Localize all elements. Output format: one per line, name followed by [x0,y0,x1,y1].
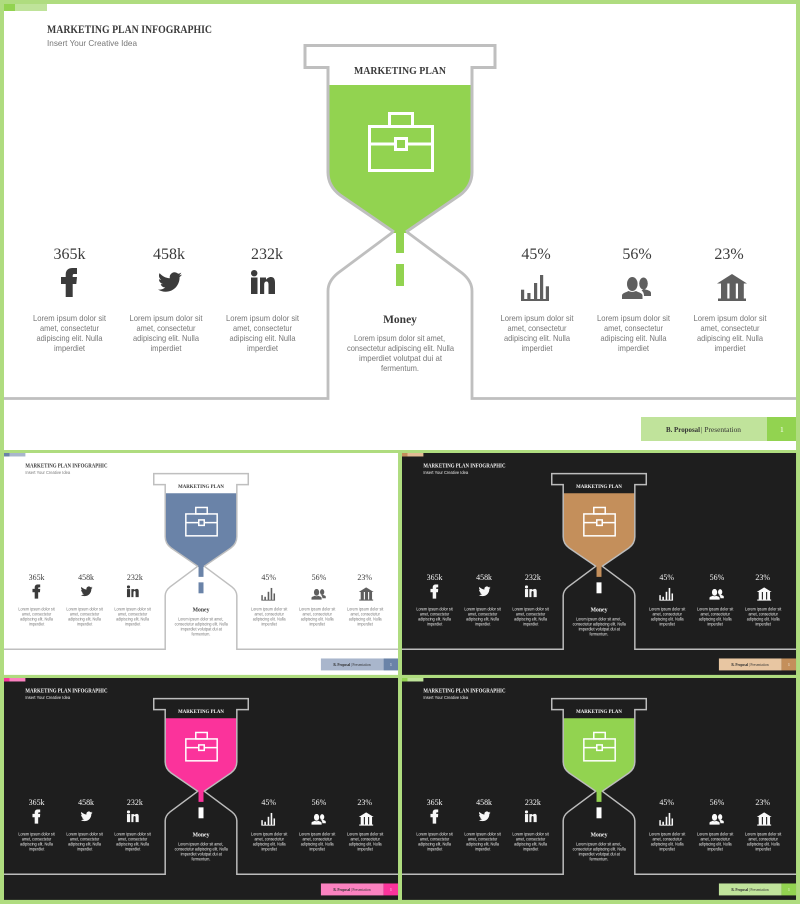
hourglass [4,46,796,398]
stat: 45%: Lorem ipsum dolor sit [649,607,686,612]
stat: 232k [226,246,300,353]
stat: 365k: amet, consectetur [22,837,52,842]
stat: 56%: 56% [622,246,652,263]
stat: 56%: imperdiet [618,343,650,353]
money text: imperdiet volutpat dui at [579,627,621,632]
stat: 232k: amet, consectetur [118,837,148,842]
stat: 365k [18,798,56,852]
stat: 365k: imperdiet [29,847,45,852]
stat: 232k: 232k [251,246,283,263]
subtitle: Insert Your Creative Idea [423,470,469,475]
stat: 56%: adipiscing elit. Nulla [699,842,732,847]
stat: 458k: amet, consectetur [136,323,196,333]
stat: 56%: 56% [710,798,725,807]
stat: 45%: amet, consectetur [652,612,682,617]
corner tab [4,4,47,11]
stat: 365k [33,246,107,353]
title: MARKETING PLAN INFOGRAPHIC [25,688,107,694]
stat: 45%: 45% [659,573,674,582]
stat: 365k: amet, consectetur [420,612,450,617]
stat: 56%: 56% [312,798,327,807]
money text [347,314,454,373]
stat: 56%: adipiscing elit. Nulla [600,333,667,343]
stat: 232k: Lorem ipsum dolor sit [114,832,152,837]
money text: Money [193,833,210,839]
stat: 23%: imperdiet [357,847,374,852]
stat: 56%: amet, consectetur [303,612,332,617]
stat: 365k: Lorem ipsum dolor sit [33,313,107,323]
stat: 365k: adipiscing elit. Nulla [20,842,54,847]
stat: 23%: adipiscing elit. Nulla [747,842,780,847]
stat: 45%: Lorem ipsum dolor sit [500,313,574,323]
money text: Money [591,608,608,614]
corner tab [402,678,423,681]
footer bar: B. Proposal [731,663,748,667]
money text: consectetur adipiscing elit. Nulla [573,847,626,852]
footer bar [641,417,796,441]
stat: 365k [416,573,454,627]
stat: 458k [464,798,502,852]
stat: 56%: adipiscing elit. Nulla [301,842,334,847]
stat: 56%: amet, consectetur [303,837,332,842]
money text [175,833,228,862]
stat: 23%: adipiscing elit. Nulla [349,617,382,622]
money text: Lorem ipsum dolor sit amet, [178,842,223,847]
footer bar: B. Proposal [333,888,350,892]
money text: Money [383,314,417,326]
stat: 45%: amet, consectetur [254,837,284,842]
money text: fermentum. [590,632,608,637]
title: MARKETING PLAN INFOGRAPHIC [423,463,505,469]
stat: 365k: imperdiet [427,622,443,627]
panel: brown dark slide [402,453,796,675]
icon: briefcase [186,507,217,536]
stat: 45%: adipiscing elit. Nulla [651,617,684,622]
stat: 56% [597,246,671,353]
stat: 23%: adipiscing elit. Nulla [349,842,382,847]
stat: 56%: amet, consectetur [604,323,663,333]
stat: 23% [694,246,767,353]
stat: 365k [416,798,454,852]
stat: 458k: 458k [476,573,492,582]
subtitle: Insert Your Creative Idea [423,695,469,700]
stat: 56%: Lorem ipsum dolor sit [697,607,734,612]
stat: 232k: imperdiet [523,847,539,852]
corner tab [402,453,423,456]
money text: fermentum. [192,857,210,862]
title: MARKETING PLAN INFOGRAPHIC [47,24,212,36]
icon: briefcase [584,732,615,761]
stat: 45%: adipiscing elit. Nulla [253,617,286,622]
stat: 23% [347,798,384,852]
footer bar: 1 [390,663,392,667]
icon: briefcase [584,507,615,536]
stat: 23%: Lorem ipsum dolor sit [347,607,384,612]
stat: 45% [500,246,574,353]
stat: 45%: imperdiet [261,622,278,627]
stat: 56%: Lorem ipsum dolor sit [597,313,671,323]
stat: 56%: amet, consectetur [701,612,730,617]
stat: 232k: adipiscing elit. Nulla [514,842,548,847]
corner tab [4,678,25,681]
stat: 56%: imperdiet [707,622,724,627]
hourglass label: MARKETING PLAN [576,709,622,715]
stat: 23%: Lorem ipsum dolor sit [745,607,782,612]
stat: 45%: adipiscing elit. Nulla [504,333,570,343]
hourglass [4,474,398,649]
money text: Lorem ipsum dolor sit amet, [178,617,223,622]
stat: 458k: amet, consectetur [70,837,100,842]
money text: Lorem ipsum dolor sit amet, [354,333,445,343]
subtitle: Insert Your Creative Idea [25,470,71,475]
stat: 45%: amet, consectetur [254,612,284,617]
stat: 458k [66,798,104,852]
money text: consectetur adipiscing elit. Nulla [573,622,626,627]
footer bar [321,883,398,895]
stat: 45%: Lorem ipsum dolor sit [251,607,288,612]
stat: 45%: 45% [261,573,276,582]
footer bar [321,658,398,670]
stat: 23%: imperdiet [755,622,772,627]
corner tab [4,453,25,456]
stat: 23%: amet, consectetur [749,837,778,842]
money text [573,833,626,862]
stat: 458k: amet, consectetur [70,612,100,617]
stat: 365k: 365k [54,246,86,263]
stat: 23% [347,573,384,627]
stat: 23%: Lorem ipsum dolor sit [694,313,767,323]
stat: 23%: adipiscing elit. Nulla [747,617,780,622]
stat: 365k: amet, consectetur [420,837,450,842]
stat: 365k: 365k [427,573,443,582]
stat: 458k: Lorem ipsum dolor sit [464,607,502,612]
stat: 23%: adipiscing elit. Nulla [697,333,763,343]
stat: 45%: adipiscing elit. Nulla [651,842,684,847]
panel: main light green slide [4,4,796,450]
stat: 365k: imperdiet [29,622,45,627]
money text [175,608,228,637]
stat: 56%: 56% [312,573,327,582]
footer bar: 1 [780,425,784,434]
stat: 365k: imperdiet [427,847,443,852]
stat: 23%: amet, consectetur [700,323,760,333]
money text: fermentum. [192,632,210,637]
stat: 458k: adipiscing elit. Nulla [68,842,102,847]
stat: 56%: imperdiet [309,847,326,852]
stat: 365k: amet, consectetur [22,612,52,617]
stat: 45% [649,798,686,852]
stat: 365k: 365k [29,798,45,807]
hourglass [402,474,796,649]
stat: 56% [299,798,336,852]
stat: 23%: amet, consectetur [351,612,380,617]
stat: 56%: Lorem ipsum dolor sit [299,607,336,612]
money text: consectetur adipiscing elit. Nulla [175,622,228,627]
stat: 365k: imperdiet [54,343,86,353]
footer bar: | Presentation [351,888,371,892]
stat: 232k: imperdiet [125,622,141,627]
stat: 232k: imperdiet [125,847,141,852]
stat: 23%: amet, consectetur [351,837,380,842]
stat: 365k: adipiscing elit. Nulla [418,842,452,847]
stat: 458k: imperdiet [77,622,93,627]
icon: briefcase [369,114,433,170]
stat: 232k: Lorem ipsum dolor sit [114,607,152,612]
footer bar: | Presentation [749,663,769,667]
stat: 232k: amet, consectetur [516,612,546,617]
panel: pink dark slide [4,678,398,900]
stat: 458k [464,573,502,627]
stat: 23%: amet, consectetur [749,612,778,617]
stat: 232k [114,798,152,852]
stat: 45%: imperdiet [659,622,676,627]
money text: consectetur adipiscing elit. Nulla [347,343,454,353]
money text: fermentum. [381,363,419,373]
stat: 232k [512,798,550,852]
stat: 232k: 232k [127,573,143,582]
footer bar: | Presentation [749,888,769,892]
stat: 365k: adipiscing elit. Nulla [20,617,54,622]
stat: 232k: amet, consectetur [118,612,148,617]
hourglass label: MARKETING PLAN [178,484,224,490]
stat: 232k: adipiscing elit. Nulla [116,617,150,622]
stat: 232k: imperdiet [247,343,279,353]
stat: 23% [745,573,782,627]
stat: 45% [251,573,288,627]
money text: imperdiet volutpat dui at [181,852,223,857]
stat: 365k: 365k [29,573,45,582]
stat: 365k: Lorem ipsum dolor sit [18,832,56,837]
title: MARKETING PLAN INFOGRAPHIC [423,688,505,694]
stat: 458k: Lorem ipsum dolor sit [66,607,104,612]
stat: 365k: Lorem ipsum dolor sit [416,832,454,837]
stat: 458k: adipiscing elit. Nulla [133,333,199,343]
stat: 458k: adipiscing elit. Nulla [466,617,500,622]
stat: 458k: amet, consectetur [468,837,498,842]
hourglass [402,699,796,874]
stat: 458k: imperdiet [150,343,182,353]
stat: 232k: 232k [525,573,541,582]
stat: 365k [18,573,56,627]
stat: 23%: imperdiet [714,343,746,353]
stat: 365k: adipiscing elit. Nulla [418,617,452,622]
stat: 458k: adipiscing elit. Nulla [466,842,500,847]
money text: imperdiet volutpat dui at [181,627,223,632]
stat: 232k: adipiscing elit. Nulla [514,617,548,622]
stat: 45%: imperdiet [522,343,553,353]
subtitle: Insert Your Creative Idea [47,38,137,48]
stat: 56%: imperdiet [707,847,724,852]
stat: 232k: Lorem ipsum dolor sit [512,607,550,612]
stat: 23% [745,798,782,852]
stat: 232k: amet, consectetur [516,837,546,842]
stat: 232k: amet, consectetur [233,323,292,333]
subtitle: Insert Your Creative Idea [25,695,71,700]
footer bar: 1 [788,888,790,892]
stat: 232k: imperdiet [523,622,539,627]
money text: Money [193,608,210,614]
stat: 365k: amet, consectetur [40,323,99,333]
stat: 458k: Lorem ipsum dolor sit [66,832,104,837]
stat: 45%: imperdiet [659,847,676,852]
stat: 56%: adipiscing elit. Nulla [301,617,334,622]
stat: 365k: Lorem ipsum dolor sit [416,607,454,612]
stat: 45%: amet, consectetur [652,837,682,842]
stat: 23%: 23% [357,573,372,582]
hourglass [4,699,398,874]
footer bar: | Presentation [351,663,371,667]
hourglass label: MARKETING PLAN [178,709,224,715]
stat: 45%: Lorem ipsum dolor sit [251,832,288,837]
stat: 458k: 458k [476,798,492,807]
stat: 232k: Lorem ipsum dolor sit [226,313,300,323]
stat: 458k: amet, consectetur [468,612,498,617]
stat: 56%: adipiscing elit. Nulla [699,617,732,622]
stat: 56%: 56% [710,573,725,582]
stat: 23%: imperdiet [755,847,772,852]
stat: 458k: 458k [153,246,185,263]
stat: 23%: Lorem ipsum dolor sit [347,832,384,837]
money text: Money [591,833,608,839]
money text: Lorem ipsum dolor sit amet, [576,617,621,622]
stat: 232k [114,573,152,627]
stat: 458k: imperdiet [475,847,491,852]
money text [573,608,626,637]
stat: 56% [299,573,336,627]
icon: briefcase [186,732,217,761]
footer bar: 1 [788,663,790,667]
stat: 232k: 232k [525,798,541,807]
stat: 45%: amet, consectetur [508,323,567,333]
stat: 458k: adipiscing elit. Nulla [68,617,102,622]
stat: 458k [130,246,203,353]
stat: 458k: Lorem ipsum dolor sit [130,313,203,323]
footer bar [719,883,796,895]
money text: imperdiet volutpat dui at [579,852,621,857]
stat: 56%: imperdiet [309,622,326,627]
footer bar: | Presentation [701,425,741,434]
stat: 458k [66,573,104,627]
stat: 56% [697,798,734,852]
stat: 56%: amet, consectetur [701,837,730,842]
stat: 23%: 23% [357,798,372,807]
stat: 365k: 365k [427,798,443,807]
stat: 458k: 458k [78,573,94,582]
stat: 45%: imperdiet [261,847,278,852]
stat: 232k: adipiscing elit. Nulla [230,333,296,343]
stat: 365k: adipiscing elit. Nulla [36,333,103,343]
stat: 45%: 45% [261,798,276,807]
stat: 45% [649,573,686,627]
hourglass label: MARKETING PLAN [354,65,446,77]
stat: 458k: imperdiet [77,847,93,852]
footer bar [719,658,796,670]
stat: 23%: 23% [714,246,744,263]
stat: 23%: Lorem ipsum dolor sit [745,832,782,837]
stat: 232k: 232k [127,798,143,807]
stat: 45%: 45% [659,798,674,807]
stat: 56% [697,573,734,627]
stat: 232k: Lorem ipsum dolor sit [512,832,550,837]
panel: green dark slide [402,678,796,900]
money text: consectetur adipiscing elit. Nulla [175,847,228,852]
stat: 45%: 45% [521,246,551,263]
stat: 458k: Lorem ipsum dolor sit [464,832,502,837]
stat: 45% [251,798,288,852]
panel: blue light slide [4,453,398,675]
stat: 232k [512,573,550,627]
stat: 23%: 23% [755,798,770,807]
stat: 365k: Lorem ipsum dolor sit [18,607,56,612]
stat: 56%: Lorem ipsum dolor sit [697,832,734,837]
footer bar: B. Proposal [333,663,350,667]
footer bar: B. Proposal [731,888,748,892]
stat: 458k: 458k [78,798,94,807]
footer bar: 1 [390,888,392,892]
money text: fermentum. [590,857,608,862]
stat: 45%: Lorem ipsum dolor sit [649,832,686,837]
title: MARKETING PLAN INFOGRAPHIC [25,463,107,469]
stat: 232k: adipiscing elit. Nulla [116,842,150,847]
stat: 23%: 23% [755,573,770,582]
stat: 23%: imperdiet [357,622,374,627]
stat: 56%: Lorem ipsum dolor sit [299,832,336,837]
footer bar: B. Proposal [666,425,700,434]
money text: Lorem ipsum dolor sit amet, [576,842,621,847]
stat: 458k: imperdiet [475,622,491,627]
money text: imperdiet volutpat dui at [359,353,443,363]
stat: 45%: adipiscing elit. Nulla [253,842,286,847]
hourglass label: MARKETING PLAN [576,484,622,490]
